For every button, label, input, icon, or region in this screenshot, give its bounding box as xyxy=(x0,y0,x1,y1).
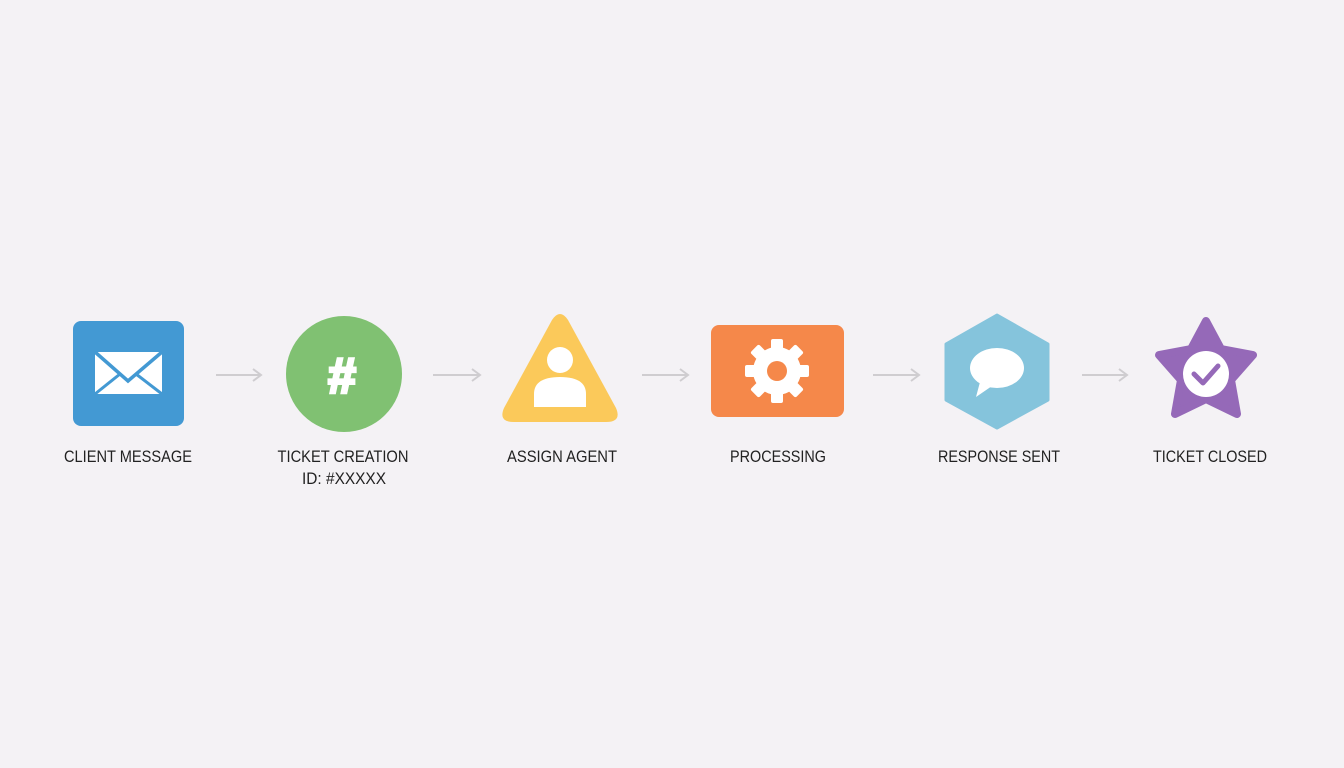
icon: hash circle xyxy=(286,316,402,432)
arrow 2 xyxy=(433,369,480,381)
step: response sent xyxy=(938,315,1060,466)
icon: star with check xyxy=(1159,321,1253,414)
icon: envelope xyxy=(73,321,184,426)
step: assign agent xyxy=(502,314,618,466)
label: client message: CLIENT MESSAGE xyxy=(64,448,192,466)
icon: hash circle: # xyxy=(328,348,356,404)
icon: person triangle xyxy=(502,314,618,422)
icon: speech bubble hexagon xyxy=(946,315,1048,428)
label: ticket creation: TICKET CREATION xyxy=(278,448,408,466)
label: assign agent: ASSIGN AGENT xyxy=(507,448,617,466)
step: processing xyxy=(711,325,844,466)
label: ticket creation: ID: #XXXXX xyxy=(302,470,386,488)
step: ticket creation xyxy=(278,316,408,488)
icon: gear xyxy=(711,325,844,417)
step: ticket closed xyxy=(1153,321,1267,466)
step: client message xyxy=(64,321,192,466)
label: processing: PROCESSING xyxy=(730,448,826,466)
arrow 4 xyxy=(873,369,919,381)
label: ticket closed: TICKET CLOSED xyxy=(1153,448,1267,466)
label: response sent: RESPONSE SENT xyxy=(938,448,1060,466)
arrow 5 xyxy=(1082,369,1127,381)
label: ticket creation xyxy=(278,448,408,488)
arrow 1 xyxy=(216,369,261,381)
arrow 3 xyxy=(642,369,688,381)
